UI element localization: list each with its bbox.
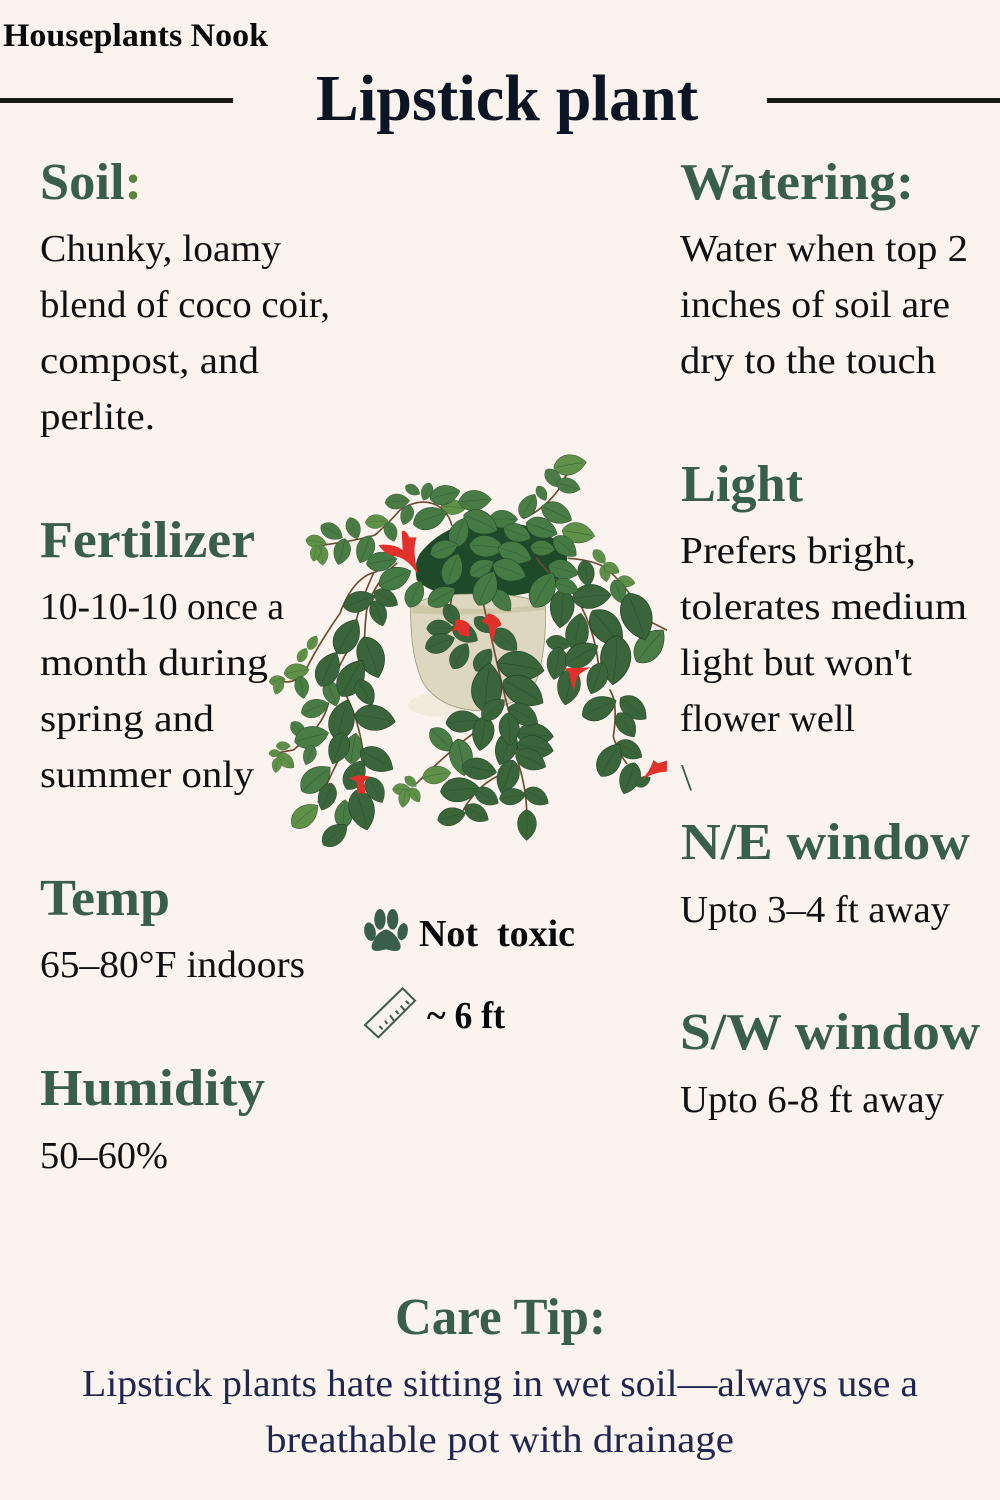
title: Lipstick plant <box>316 62 698 135</box>
foliage backing <box>416 522 567 597</box>
text: soil: blend of coco coir, <box>40 284 330 326</box>
stray backslash: \ <box>681 757 692 799</box>
panel: watering <box>680 154 968 382</box>
text: fertilizer: 10-10-10 once a <box>40 586 284 628</box>
heading: watering: Watering: <box>680 154 914 211</box>
text: soil: Chunky, loamy <box>40 228 281 270</box>
text: care tip <box>82 1363 918 1461</box>
panel: temperature <box>40 870 305 986</box>
illustration: lipstick plant in pot <box>268 452 673 852</box>
text: watering: inches of soil are <box>680 284 950 326</box>
label: not toxic: Not toxic <box>419 913 575 955</box>
heading: light: Light <box>681 456 804 513</box>
leaves: light sprigs <box>268 452 636 834</box>
text: light: flower well <box>680 698 855 740</box>
text: soil <box>40 228 330 438</box>
pot shadow <box>408 694 465 716</box>
leaves: crown of the plant <box>365 502 582 616</box>
heading: soil: Soil: <box>40 154 142 211</box>
panel: fertilizer <box>40 512 284 796</box>
text: watering: dry to the touch <box>680 340 936 382</box>
heading: fertilizer: Fertilizer <box>40 512 255 569</box>
text: fertilizer: month during <box>40 642 268 684</box>
text: fertilizer <box>40 586 284 796</box>
icon: ruler <box>365 988 415 1037</box>
panel: care tip <box>82 1289 918 1461</box>
panel: light <box>680 456 967 740</box>
text: light <box>680 530 967 740</box>
text: N/E window: Upto 3–4 ft away <box>680 889 950 931</box>
heading: care tip: Care Tip: <box>395 1289 606 1346</box>
text: light: tolerates medium <box>680 586 967 628</box>
text: light: light but won't <box>680 642 912 684</box>
heading: S/W window: S/W window <box>680 1004 980 1061</box>
pot <box>411 594 545 711</box>
text: care tip: breathable pot with drainage <box>266 1419 734 1461</box>
text: light: Prefers bright, <box>680 530 916 572</box>
text: watering <box>680 228 968 382</box>
text: fertilizer: spring and <box>40 698 214 740</box>
vine stems <box>275 473 667 820</box>
panel: N/E window <box>680 814 970 931</box>
text: fertilizer: summer only <box>40 754 254 796</box>
panel: soil <box>40 154 330 438</box>
heading: N/E window: N/E window <box>681 814 970 871</box>
heading: humidity: Humidity <box>40 1060 265 1117</box>
leaves: mid green <box>287 465 673 829</box>
title rule right <box>767 98 1000 103</box>
icon: paw print <box>363 909 409 951</box>
panel: S/W window <box>680 1004 980 1121</box>
panel: humidity <box>40 1060 265 1177</box>
label: size: ~ 6 ft <box>427 995 505 1037</box>
text: S/W window: Upto 6-8 ft away <box>680 1079 944 1121</box>
text: temp: 65–80°F indoors <box>40 944 305 986</box>
text: soil: compost, and <box>40 340 259 382</box>
text: care tip: Lipstick plants hate sitting in wet soil—always use a <box>82 1363 918 1405</box>
text: soil: perlite. <box>40 396 155 438</box>
leaves: dark green <box>310 559 660 852</box>
heading: temp: Temp <box>40 870 170 927</box>
brand name: Houseplants Nook <box>3 18 269 54</box>
title rule left <box>0 98 233 103</box>
text: humidity: 50–60% <box>40 1135 168 1177</box>
flowers: red lipstick blooms <box>349 531 668 793</box>
text: watering: Water when top 2 <box>680 228 968 270</box>
